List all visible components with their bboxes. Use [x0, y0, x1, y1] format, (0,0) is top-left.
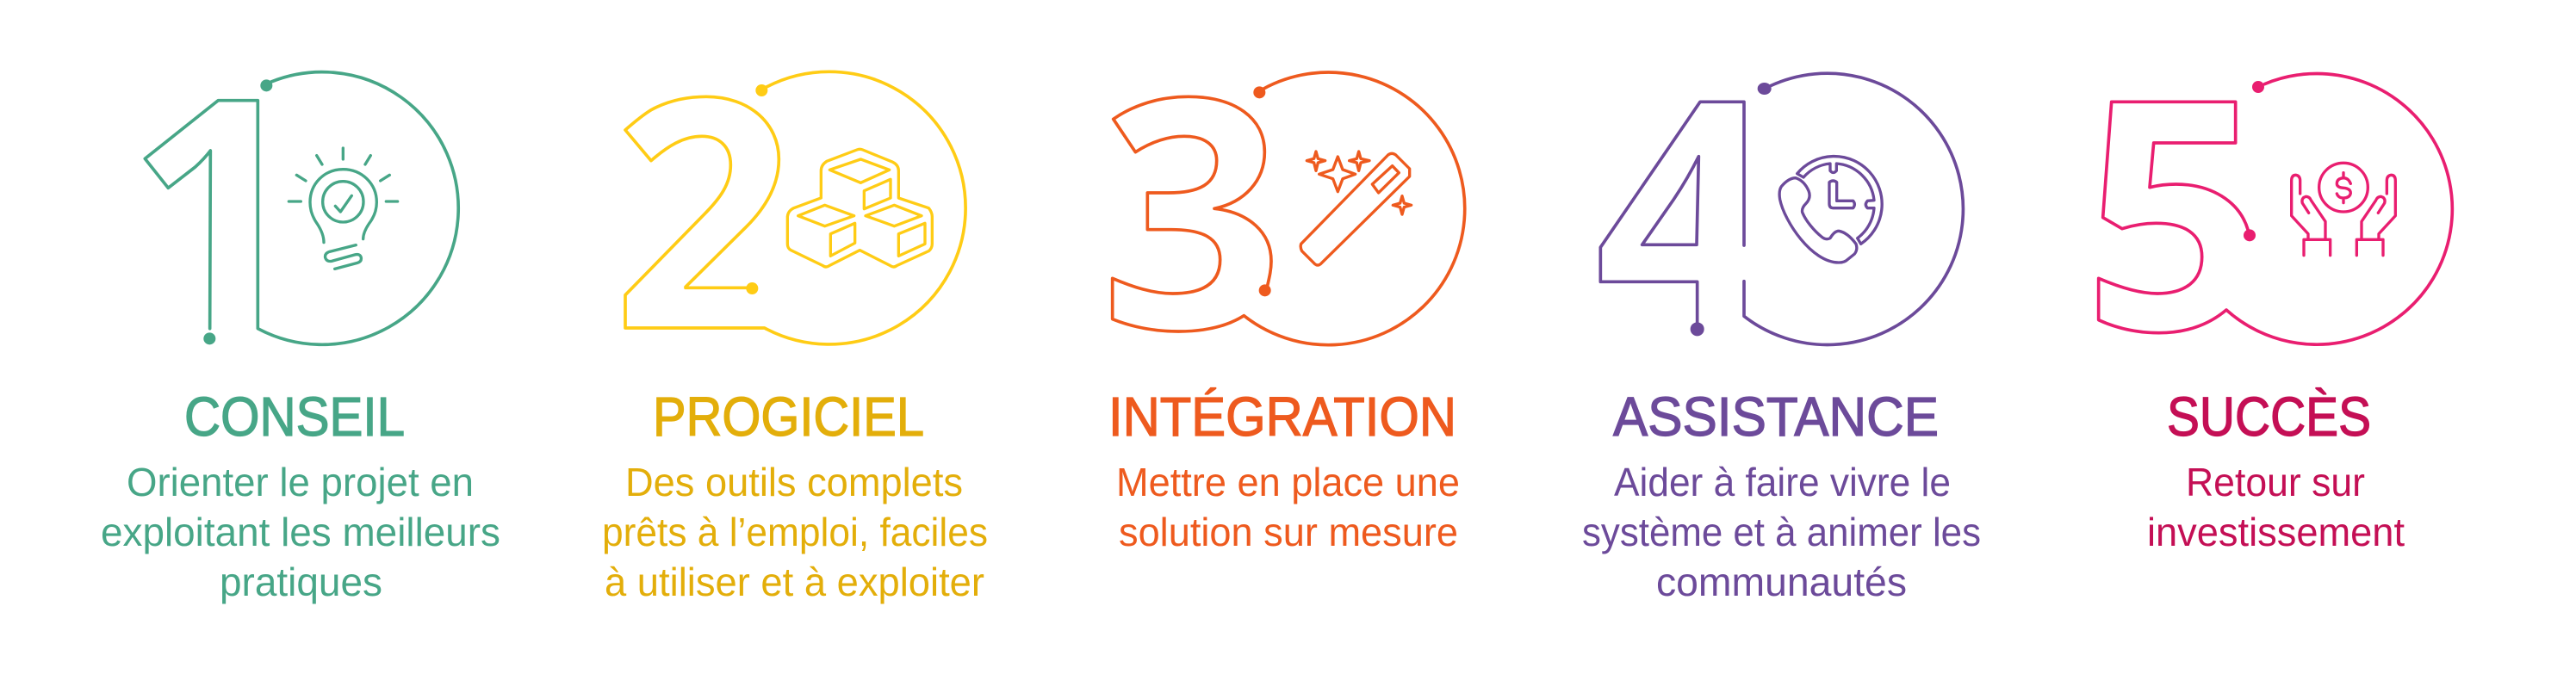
number 3 with circle outline	[1113, 72, 1465, 345]
heading: succes: SUCCÈS	[2167, 386, 2371, 448]
panel: step 4 assistance	[1582, 73, 1981, 604]
icon: light bulb with check mark	[289, 148, 398, 269]
icon: hands holding a coin	[2292, 163, 2395, 256]
text block: succes description	[2147, 460, 2405, 554]
text block: progiciel description	[602, 460, 988, 604]
text block: conseil description: exploitant les meilleurs	[101, 510, 500, 554]
text block: progiciel description: à utiliser et à exploiter	[605, 560, 984, 604]
text block: integration description: solution sur mesure	[1119, 510, 1458, 554]
text block: succes description: investissement	[2147, 510, 2405, 554]
panel: step 2 progiciel	[602, 71, 988, 604]
heading: integration: INTÉGRATION	[1108, 386, 1456, 448]
panel: step 1 conseil	[101, 72, 500, 604]
text block: conseil description: Orienter le projet en	[127, 460, 474, 504]
icon: magic wand with sparkles	[1300, 152, 1412, 265]
text block: succes description: Retour sur	[2186, 460, 2365, 504]
number 2 with circle outline	[625, 71, 965, 344]
text block: progiciel description: Des outils complets	[625, 460, 963, 504]
panel: step 5 succes	[2099, 73, 2452, 554]
text block: assistance description: communautés	[1656, 560, 1907, 604]
heading: progiciel: PROGICIEL	[653, 386, 924, 448]
text block: conseil description: pratiques	[220, 560, 382, 604]
heading: assistance: ASSISTANCE	[1613, 386, 1939, 448]
heading: conseil: CONSEIL	[184, 386, 405, 448]
text block: assistance description: Aider à faire vivre le	[1614, 460, 1951, 504]
text block: conseil description	[101, 460, 500, 604]
panel: step 3 integration	[1108, 72, 1465, 554]
text block: integration description	[1116, 460, 1460, 554]
number 5 with circle outline	[2099, 73, 2452, 344]
text block: progiciel description: prêts à l’emploi, faciles	[602, 510, 988, 554]
icon: phone with clock	[1779, 157, 1882, 263]
icon: stacked cubes	[787, 149, 932, 267]
number 1 with circle outline	[145, 72, 458, 344]
text block: integration description: Mettre en place une	[1116, 460, 1460, 504]
number 4 with circle outline	[1600, 73, 1963, 345]
text block: assistance description: système et à animer les	[1582, 510, 1981, 554]
text block: assistance description	[1582, 460, 1981, 604]
